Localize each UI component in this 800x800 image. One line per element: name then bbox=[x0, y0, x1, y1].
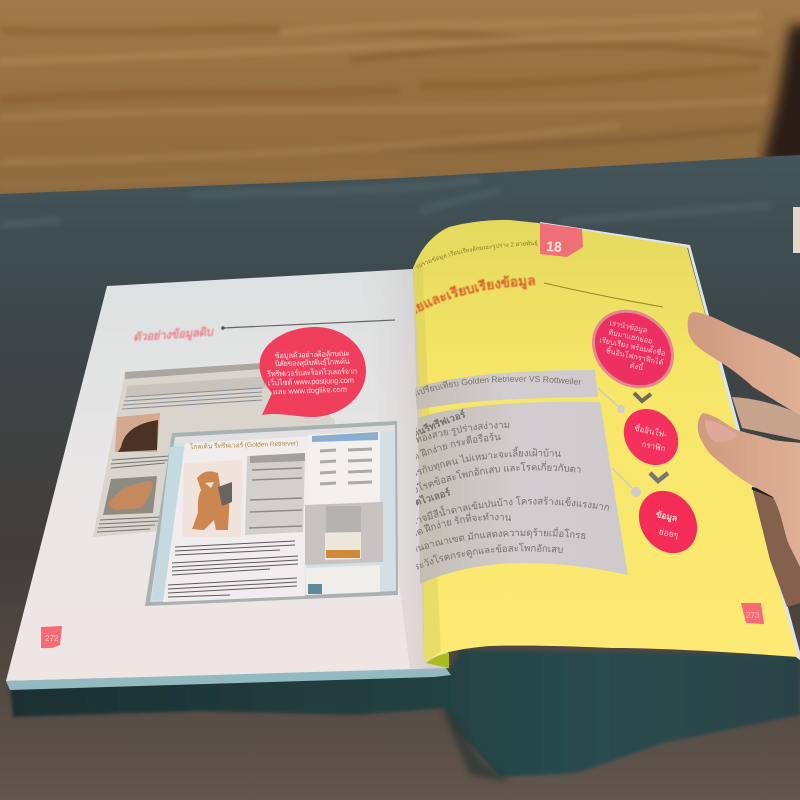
page number: 272 bbox=[45, 634, 59, 643]
chevron bbox=[650, 473, 668, 481]
circle: infographic name: ชื่ออินโฟ- bbox=[633, 422, 668, 439]
shadow under book bbox=[10, 650, 800, 782]
article panel bbox=[163, 436, 310, 602]
toolbar bbox=[174, 425, 395, 443]
thumb bbox=[698, 413, 800, 567]
page edge bbox=[6, 667, 451, 690]
circle: detail data: ข้อมูล bbox=[655, 509, 678, 524]
dark wood corner bbox=[762, 25, 800, 165]
circle: intro: ดิบมาแยกย่อย bbox=[608, 327, 653, 346]
circle: intro: ชิ้นอินโฟกราฟิกได้ bbox=[605, 345, 665, 367]
body text: ฉลาด ฝึกง่าย กระตือรือร้น bbox=[416, 432, 501, 460]
back browser window bbox=[93, 363, 335, 537]
circle: infographic name bbox=[613, 398, 689, 476]
circle: detail data: ย่อยๆ bbox=[658, 526, 679, 540]
body text: ขนสีดำ อาจมีสีน้ำตาลเข้มปนบ้าง โครงสร้างแข็งแรงมาก bbox=[416, 496, 609, 524]
front browser window bbox=[145, 421, 398, 606]
finger behind page bbox=[732, 397, 800, 440]
grey title bar: ข้อมูลเปรียบเทียบ Golden Retriever VS Rottweiler bbox=[416, 376, 582, 396]
article title: โกลเด้น รีทรีฟเวอร์ (Golden Retriever) bbox=[190, 439, 299, 451]
body text: ฉลาด ฝึกง่าย รักที่จะทำงาน bbox=[416, 512, 511, 536]
connector lines bbox=[598, 388, 641, 497]
right page bbox=[413, 220, 800, 668]
heading rule bbox=[223, 320, 395, 328]
lower palm behind bbox=[752, 487, 800, 607]
chevron bbox=[634, 393, 651, 401]
page number: 273 bbox=[746, 611, 760, 620]
bubble text: ข้อมูลตัวอย่างคือลักษณะ bbox=[274, 349, 350, 360]
circle: intro: เรานำข้อมูล bbox=[609, 318, 648, 335]
body text: ควรระวังโรคกระดูกและข้อสะโพกอักเสบ bbox=[416, 542, 563, 570]
bubble text: และ www.doglike.com bbox=[273, 385, 347, 396]
circle: intro bbox=[578, 296, 688, 402]
grey content box bbox=[416, 402, 628, 584]
speech bubble bbox=[260, 327, 366, 417]
circle: detail data bbox=[627, 479, 709, 565]
article text bbox=[168, 541, 298, 597]
heading: ตัวอย่างข้อมูลดิบ bbox=[133, 325, 215, 345]
circle: intro: ดังนี้ bbox=[629, 360, 645, 372]
wood wall background bbox=[0, 0, 800, 200]
body text: เป็นมิตรกับทุกคน ไม่เหมาะจะเลี้ยงเฝ้าบ้าน bbox=[416, 446, 561, 476]
bubble text: เว็บไซต์ www.postjung.com bbox=[268, 375, 354, 387]
body text bbox=[416, 408, 609, 570]
green spine corner bbox=[426, 653, 449, 668]
hand with fingers bbox=[688, 312, 800, 607]
photo: golden retriever bbox=[103, 476, 157, 515]
chapter tab bbox=[540, 223, 583, 257]
lower panel bbox=[306, 565, 380, 595]
dog photo bbox=[182, 460, 243, 537]
thumbnail bbox=[705, 420, 738, 442]
grey title bar bbox=[415, 370, 598, 410]
bubble text bbox=[266, 349, 357, 396]
body text: หวงแหนอาณาเขต มักแสดงความดุร้ายเมื่อโกรธ bbox=[416, 526, 586, 552]
body text: ร็อตไวเลอร์ bbox=[416, 486, 450, 506]
breed info table bbox=[245, 453, 305, 535]
chapter number: 18 bbox=[546, 238, 562, 255]
header strip text: การรวบรวมข้อมูล เรียบเรียงลักษณะรูปร่าง 2 สายพันธุ์ bbox=[416, 240, 538, 268]
heading rule bbox=[544, 283, 663, 307]
photo: pug bbox=[115, 413, 160, 452]
white page edge bbox=[540, 222, 800, 660]
page number tab bbox=[741, 603, 764, 624]
body text: ควรระวังโรคข้อสะโพกอักเสบ และโรคเกี่ยวกับตา bbox=[416, 460, 580, 493]
right column form bbox=[308, 431, 380, 505]
page number tab bbox=[41, 626, 62, 648]
circle: infographic name: กราฟิก bbox=[641, 440, 666, 453]
heading: ย่อยและเรียบเรียงข้อมูล bbox=[416, 274, 536, 314]
circle: intro: เรียบเรียง พร้อมตั้งชื่อ bbox=[599, 334, 667, 358]
body text: ขนสีทองสวย รูปร่างสง่างาม bbox=[416, 422, 510, 443]
body text: โกลเด้นรีทรีฟเวอร์ bbox=[416, 408, 465, 437]
index finger bbox=[688, 312, 800, 415]
bubble text: รีทรีฟเวอร์และร็อตไวเลอร์จาก bbox=[266, 365, 357, 379]
sidebar bbox=[152, 446, 184, 600]
left page bbox=[6, 269, 451, 690]
advert box bbox=[305, 502, 383, 565]
bubble text: นิสัยของสุนัขพันธุ์โกลเด้น bbox=[274, 357, 350, 368]
